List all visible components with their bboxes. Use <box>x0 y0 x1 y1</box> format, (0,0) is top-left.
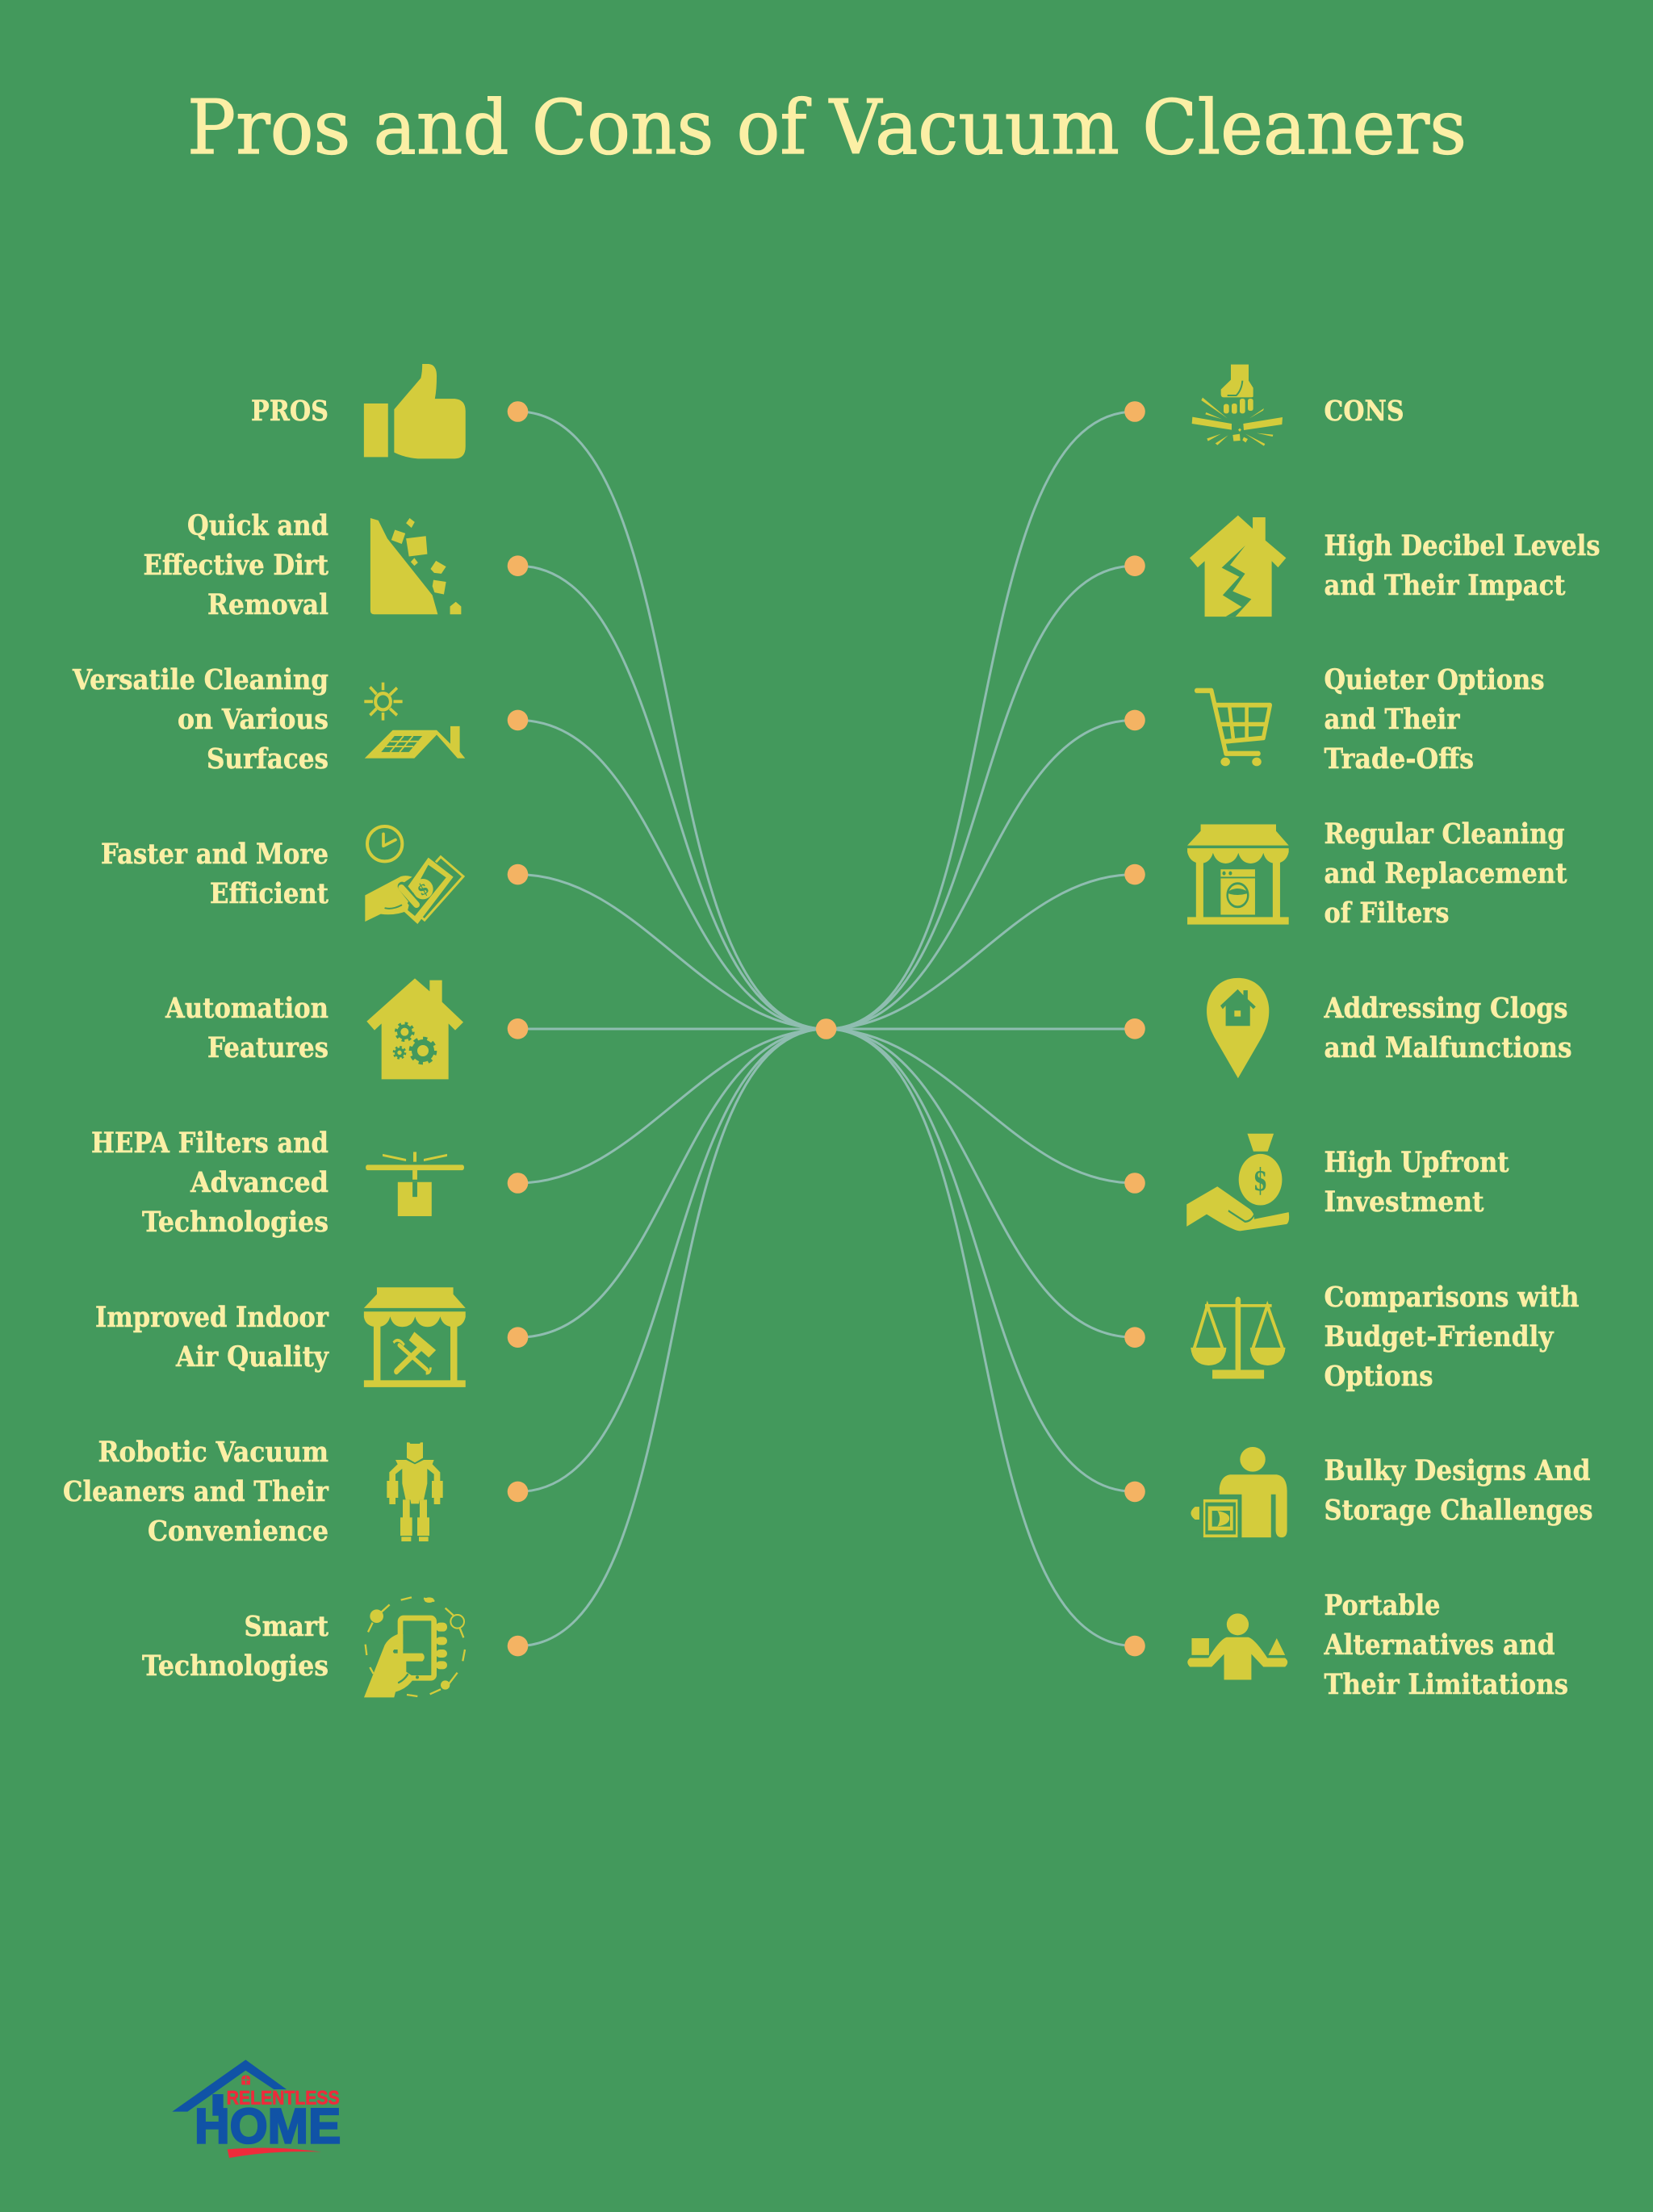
label: Quieter Options and Their Trade-Offs: Quieter Options <box>1324 664 1545 696</box>
row: Quieter Options and Their Trade-Offs <box>1124 664 1545 776</box>
row: Improved Indoor Air Quality <box>95 1287 528 1387</box>
label: Automation Features: Features <box>207 1032 329 1064</box>
logo swoosh <box>228 2147 321 2158</box>
icon: hand with money bag <box>1186 1134 1289 1231</box>
row: Versatile Cleaning on Various Surfaces <box>72 664 528 776</box>
label: Faster and More Efficient <box>101 838 329 910</box>
icon: clock and hand with money: $ <box>414 878 433 900</box>
icon: person balancing objects <box>1187 1613 1287 1679</box>
icon: robot <box>387 1442 443 1541</box>
centre hub dot <box>816 1018 836 1039</box>
icon: house with gears <box>366 978 463 1079</box>
label: High Upfront Investment: High Upfront <box>1324 1147 1509 1179</box>
label: Comparisons with Budget-Friendly Options <box>1324 1282 1579 1393</box>
row: Bulky Designs And Storage Challenges <box>1124 1447 1593 1541</box>
label: Portable Alternatives and Their Limitations <box>1324 1590 1568 1701</box>
label: High Upfront Investment: Investment <box>1324 1186 1484 1219</box>
label: Portable Alternatives and Their Limitations: Alternatives and <box>1324 1629 1555 1662</box>
label: Addressing Clogs and Malfunctions: and Malfunctions <box>1324 1032 1572 1064</box>
icon: cracked house <box>1190 516 1286 617</box>
label: Bulky Designs And Storage Challenges <box>1324 1455 1593 1527</box>
label: Addressing Clogs and Malfunctions <box>1324 993 1572 1064</box>
row: Addressing Clogs and Malfunctions <box>1124 978 1572 1078</box>
label: Quieter Options and Their Trade-Offs: Trade-Offs <box>1324 743 1474 776</box>
connector dot <box>508 710 528 730</box>
connector dot <box>1124 1173 1145 1194</box>
label: Improved Indoor Air Quality: Improved Indoor <box>95 1302 329 1334</box>
label: Robotic Vacuum Cleaners and Their Convenience: Cleaners and Their <box>63 1476 329 1508</box>
label: Smart Technologies <box>142 1611 329 1683</box>
connector dot <box>508 1018 528 1039</box>
icon: delivery drone with box <box>366 1152 464 1216</box>
label: Robotic Vacuum Cleaners and Their Convenience: Robotic Vacuum <box>98 1436 329 1469</box>
label: Robotic Vacuum Cleaners and Their Convenience <box>63 1436 329 1548</box>
label: Automation Features: Automation <box>165 993 329 1025</box>
connector dot <box>1124 710 1145 730</box>
label: Quick and Effective Dirt Removal <box>144 510 329 621</box>
row: Faster and More Efficient <box>101 826 528 924</box>
label: Portable Alternatives and Their Limitations: Their Limitations <box>1324 1669 1568 1701</box>
label: PROS: PROS <box>251 395 329 428</box>
connector dot <box>508 1636 528 1656</box>
icon: person with safe <box>1191 1447 1287 1541</box>
logo wordmark RELENTLESS: RELENTLESS <box>227 2087 340 2109</box>
icon: shop with washing machine <box>1187 825 1289 925</box>
icon: hand with money bag: $ <box>1253 1162 1267 1198</box>
connector lines <box>518 412 1135 1646</box>
label: HEPA Filters and Advanced Technologies: Advanced <box>190 1167 329 1199</box>
connector dot <box>508 1173 528 1194</box>
label: Versatile Cleaning on Various Surfaces: Surfaces <box>207 743 329 776</box>
connector dot <box>1124 1636 1145 1656</box>
label: HEPA Filters and Advanced Technologies <box>91 1127 329 1239</box>
row: Automation Features <box>165 978 528 1079</box>
label: HEPA Filters and Advanced Technologies: Technologies <box>142 1206 329 1239</box>
label: Comparisons with Budget-Friendly Options: Comparisons with <box>1324 1282 1579 1314</box>
icon: sun and solar roof <box>364 683 465 759</box>
label: Automation Features <box>165 993 329 1064</box>
connector dot <box>508 1482 528 1502</box>
label: HEPA Filters and Advanced Technologies: HEPA Filters and <box>91 1127 329 1160</box>
logo roof <box>172 2059 287 2112</box>
label: Quieter Options and Their Trade-Offs <box>1324 664 1545 776</box>
connector dot <box>508 555 528 576</box>
label: High Decibel Levels and Their Impact: and Their Impact <box>1324 570 1566 602</box>
label: Versatile Cleaning on Various Surfaces <box>72 664 329 776</box>
logo window <box>241 2076 250 2084</box>
icon: shop with tools <box>364 1287 466 1387</box>
row: Regular Cleaning and Replacement of Filters <box>1124 818 1567 930</box>
connector dot <box>1124 1327 1145 1348</box>
row: High Decibel Levels and Their Impact <box>1124 516 1600 617</box>
label: Regular Cleaning and Replacement of Filters: Regular Cleaning <box>1324 818 1564 851</box>
label: Quick and Effective Dirt Removal: Quick and <box>187 510 329 542</box>
label: High Upfront Investment <box>1324 1147 1509 1219</box>
icon: balance scale <box>1191 1297 1286 1379</box>
icon: hand holding phone with orbit <box>364 1597 465 1697</box>
connector dot <box>1124 864 1145 884</box>
label: High Decibel Levels and Their Impact <box>1324 530 1600 602</box>
label: Faster and More Efficient: Faster and More <box>101 838 329 871</box>
label: Regular Cleaning and Replacement of Filters <box>1324 818 1567 930</box>
connector dot <box>508 401 528 422</box>
label: Quick and Effective Dirt Removal: Effective Dirt <box>144 550 329 582</box>
icon: shopping cart <box>1197 691 1270 766</box>
row: Comparisons with Budget-Friendly Options <box>1124 1282 1579 1393</box>
label: Smart Technologies: Smart <box>244 1611 329 1643</box>
label: Improved Indoor Air Quality: Air Quality <box>175 1341 329 1374</box>
connector dot <box>1124 1018 1145 1039</box>
icon: thumbs up <box>364 364 466 458</box>
label: Faster and More Efficient: Efficient <box>210 878 329 910</box>
label: Quick and Effective Dirt Removal: Removal <box>207 589 329 621</box>
title: Pros and Cons of Vacuum Cleaners <box>187 84 1467 171</box>
icon: fist breaking <box>1192 365 1283 446</box>
row: CONS <box>1124 365 1404 446</box>
connector dot <box>1124 1482 1145 1502</box>
connector dot <box>508 864 528 884</box>
label: Versatile Cleaning on Various Surfaces: on Various <box>178 704 329 736</box>
label: Regular Cleaning and Replacement of Filters: of Filters <box>1324 897 1450 930</box>
label: Bulky Designs And Storage Challenges: Bulky Designs And <box>1324 1455 1590 1487</box>
label: Portable Alternatives and Their Limitations: Portable <box>1324 1590 1440 1622</box>
icon: location pin with house <box>1207 978 1269 1078</box>
label: Bulky Designs And Storage Challenges: Storage Challenges <box>1324 1495 1593 1527</box>
label: Robotic Vacuum Cleaners and Their Convenience: Convenience <box>148 1516 329 1548</box>
connector dot <box>1124 401 1145 422</box>
row: Quick and Effective Dirt Removal <box>144 510 528 621</box>
row: Robotic Vacuum Cleaners and Their Convenience <box>63 1436 528 1548</box>
label: Smart Technologies: Technologies <box>142 1650 329 1683</box>
row: Smart Technologies <box>142 1597 528 1697</box>
label: Improved Indoor Air Quality <box>95 1302 329 1374</box>
label: Quieter Options and Their Trade-Offs: and Their <box>1324 704 1460 736</box>
label: Versatile Cleaning on Various Surfaces: Versatile Cleaning <box>72 664 329 696</box>
icon: clock and hand with money <box>365 826 463 924</box>
logo wordmark HOME: HOME <box>195 2097 341 2153</box>
row: PROS <box>251 364 528 458</box>
label: Regular Cleaning and Replacement of Filters: and Replacement <box>1324 858 1567 890</box>
connector dot <box>1124 555 1145 576</box>
connector dot <box>508 1327 528 1348</box>
label: Comparisons with Budget-Friendly Options: Budget-Friendly <box>1324 1321 1554 1353</box>
label: High Decibel Levels and Their Impact: High Decibel Levels <box>1324 530 1600 562</box>
label: Addressing Clogs and Malfunctions: Addressing Clogs <box>1324 993 1567 1025</box>
row: High Upfront Investment <box>1124 1134 1509 1231</box>
row: HEPA Filters and Advanced Technologies <box>91 1127 528 1239</box>
logo: Relentless Home <box>172 2059 341 2158</box>
icon: landslide rocks <box>370 518 461 614</box>
label: CONS: CONS <box>1324 395 1404 428</box>
label: Comparisons with Budget-Friendly Options: Options <box>1324 1361 1433 1393</box>
row: Portable Alternatives and Their Limitations <box>1124 1590 1568 1701</box>
